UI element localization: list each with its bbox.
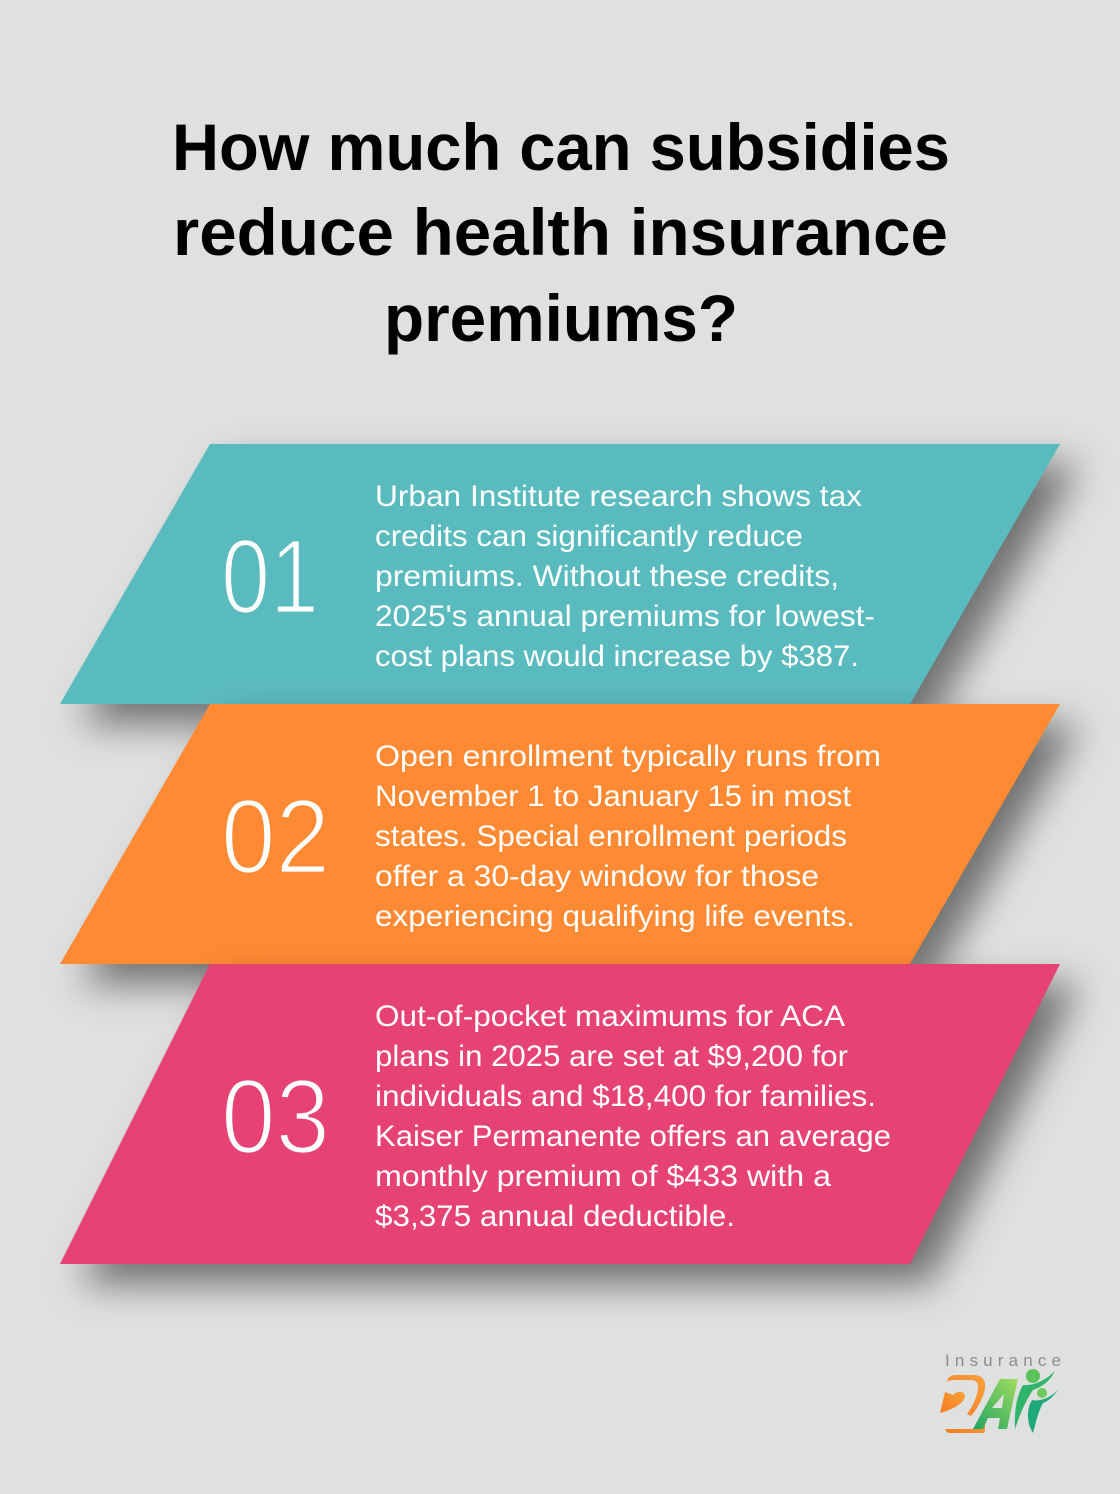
icon: green A	[973, 1379, 1018, 1429]
title: premiums?	[384, 281, 738, 355]
icon: orange 2 with heart	[940, 1375, 985, 1433]
text block: step 01: premiums. Without these credits,	[375, 560, 839, 593]
text block: step 03: Kaiser Permanente offers an average	[375, 1120, 891, 1153]
text block: step 02: Open enrollment typically runs from	[375, 740, 881, 773]
number 01: 01	[221, 518, 319, 636]
text block: step 03: $3,375 annual deductible.	[375, 1200, 735, 1233]
title: reduce health insurance	[173, 195, 948, 269]
number 02: 02	[221, 778, 330, 896]
panel: step 03	[60, 964, 1080, 1284]
logo wordmark: Insurance	[945, 1351, 1061, 1370]
text block: step 01: cost plans would increase by $387.	[375, 640, 859, 673]
text block: step 03: individuals and $18,400 for families.	[375, 1080, 876, 1113]
text block: step 02: experiencing qualifying life events.	[375, 900, 855, 933]
title: How much can subsidies	[172, 110, 950, 184]
text block: step 01: Urban Institute research shows tax	[375, 480, 862, 513]
text block: step 01: credits can significantly reduce	[375, 520, 803, 553]
logo: Insurance2Ai	[940, 1351, 1061, 1433]
icon: large figure	[1015, 1369, 1055, 1429]
text block: step 03: plans in 2025 are set at $9,200 for	[375, 1040, 848, 1073]
panel: step 02	[60, 704, 1080, 984]
text block: step 03	[375, 1000, 891, 1233]
text block: step 03: monthly premium of $433 with a	[375, 1160, 831, 1193]
title	[172, 110, 950, 355]
text block: step 02: offer a 30-day window for those	[375, 860, 819, 893]
panel: step 01	[60, 444, 1080, 724]
text block: step 01: 2025's annual premiums for lowest-	[375, 600, 875, 633]
icon: small figure	[1028, 1388, 1058, 1433]
text block: step 01	[375, 480, 875, 673]
number 03: 03	[221, 1058, 330, 1176]
text block: step 02	[375, 740, 881, 933]
text block: step 02: November 1 to January 15 in most	[375, 780, 852, 813]
text block: step 02: states. Special enrollment periods	[375, 820, 847, 853]
text block: step 03: Out-of-pocket maximums for ACA	[375, 1000, 845, 1033]
